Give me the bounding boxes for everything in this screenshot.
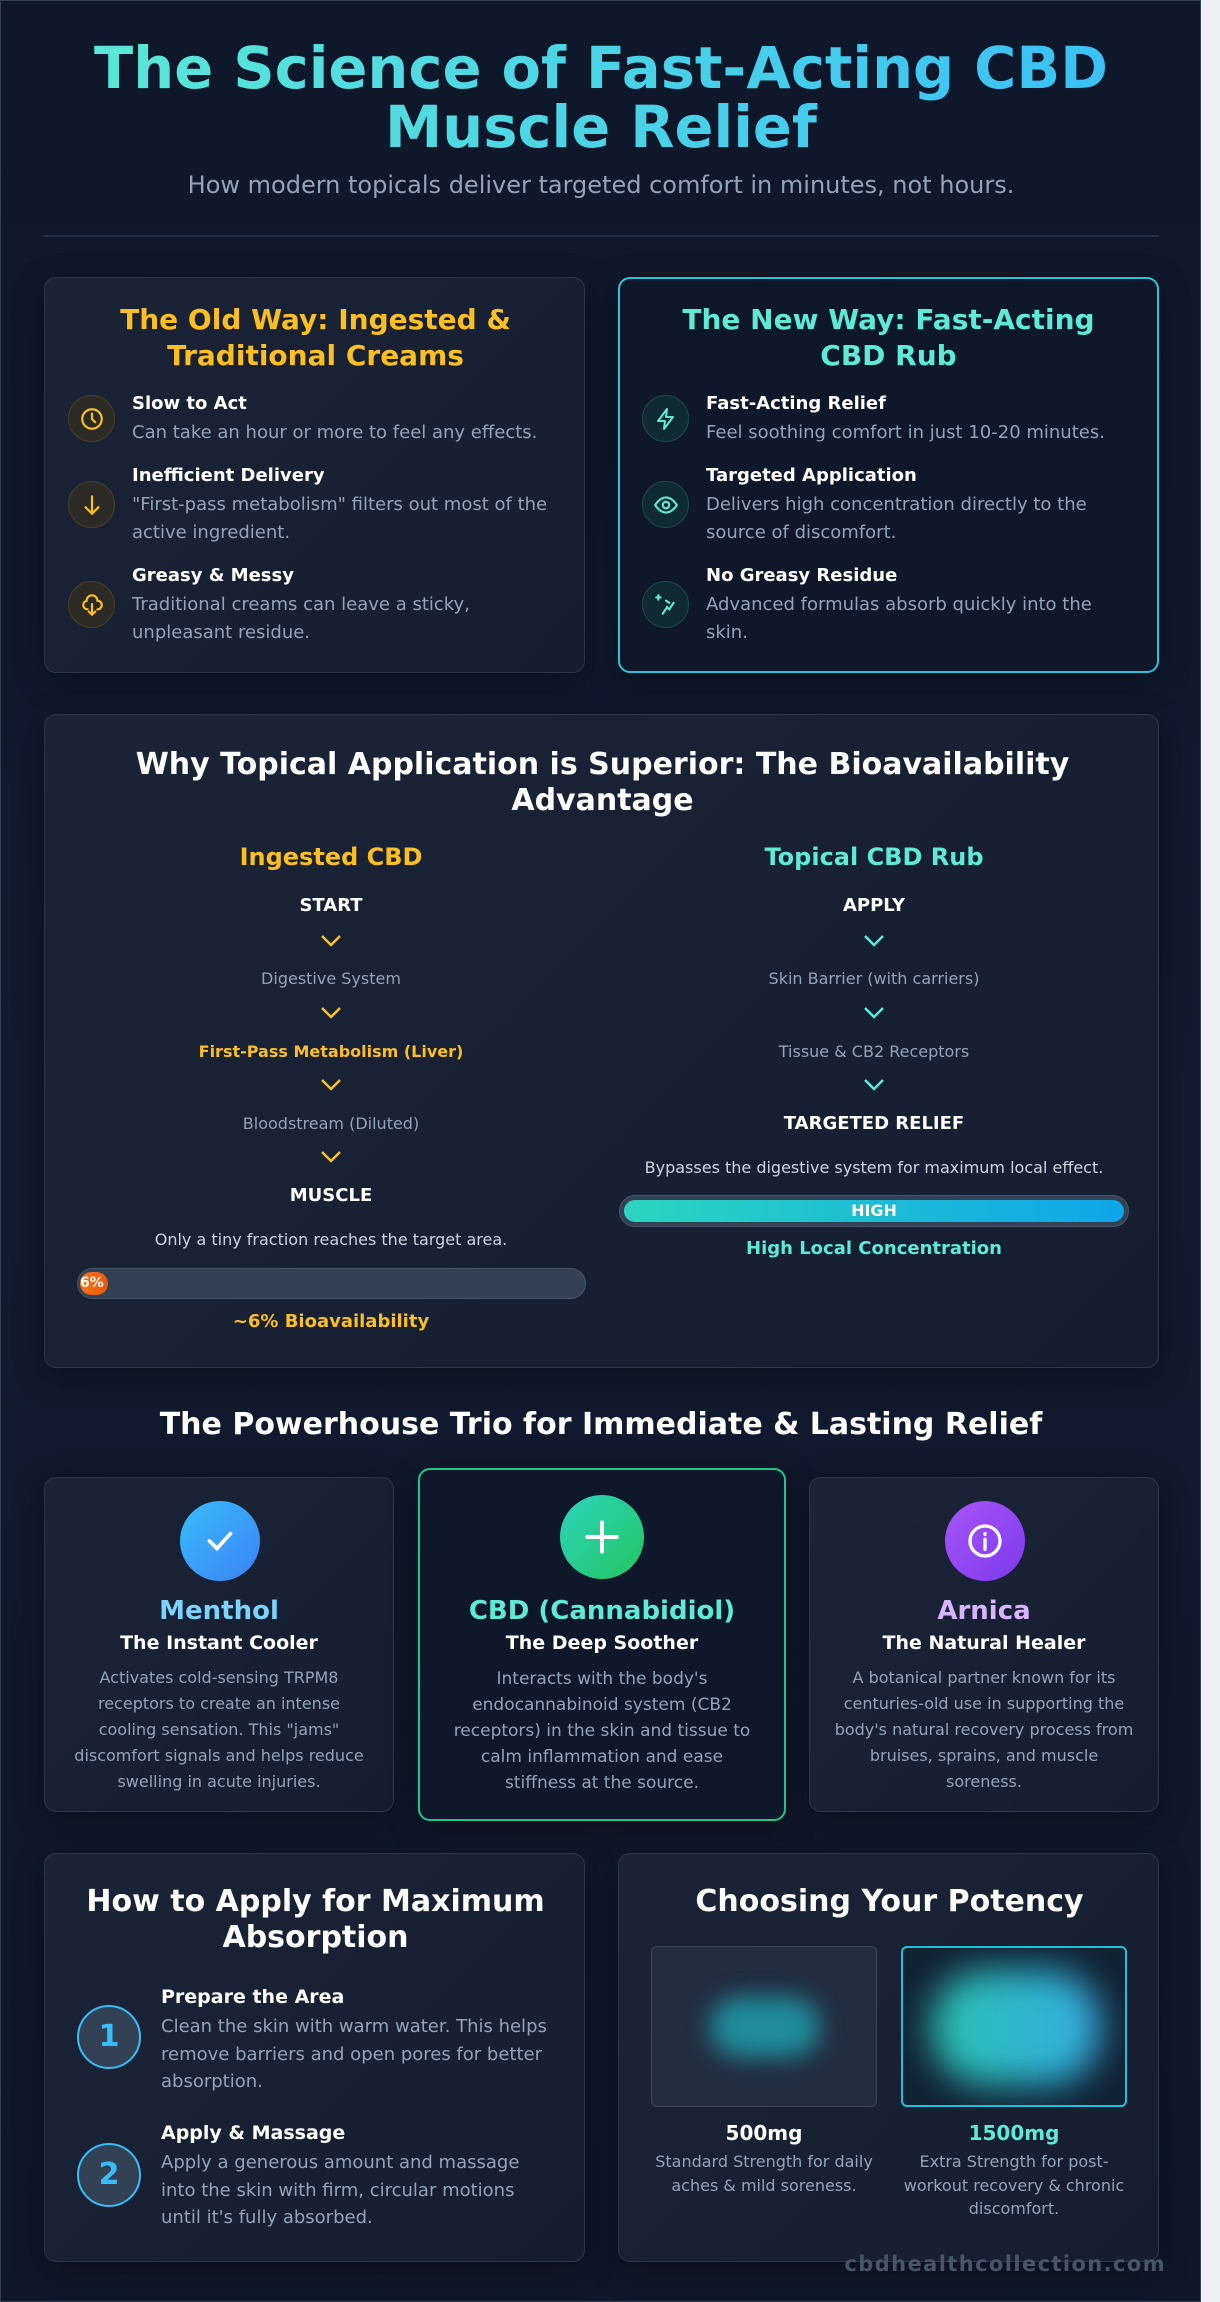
title — [1, 39, 1201, 157]
heading: how to apply: Absorption — [222, 1920, 409, 1955]
icon: sparkle — [642, 581, 689, 628]
bar: 6%: 6% — [80, 1275, 104, 1291]
item: greasy: Greasy & Messy — [132, 565, 294, 586]
heading: new way: The New Way: Fast-Acting — [682, 303, 1095, 336]
item: fast-acting: Fast-Acting Relief — [706, 393, 886, 414]
subtitle: How modern topicals deliver targeted comfort in minutes, not hours. — [188, 171, 1014, 199]
step 1 — [77, 2005, 141, 2069]
card: arnica: The Natural Healer — [882, 1632, 1086, 1654]
column: topical: Tissue & CB2 Receptors — [779, 1042, 969, 1061]
card: cbd: Interacts with the body's endocannabinoid system (CB2 receptors) in the skin and tissue to calm inflammation and ease stiffness at the source. — [454, 1669, 750, 1793]
panel: how to apply: Apply & Massage — [161, 2122, 345, 2144]
step 2: 2 — [99, 2157, 119, 2192]
potency: 500mg — [651, 1946, 877, 2107]
card: arnica — [809, 1477, 1159, 1812]
panel: new way: Advanced formulas absorb quickly into the skin. — [706, 594, 1092, 643]
card: cbd: CBD (Cannabidiol) — [469, 1596, 735, 1626]
card: menthol: Activates cold-sensing TRPM8 receptors to create an intense cooling sensation. This "jams" discomfort signals and helps reduce swelling in acute injuries. — [74, 1668, 364, 1791]
icon: plus — [560, 1495, 644, 1579]
item: inefficient delivery: Inefficient Delivery — [132, 465, 325, 486]
icon: cloud — [68, 581, 115, 628]
icon: check — [180, 1501, 260, 1581]
column: topical — [619, 843, 1129, 1259]
card: menthol: The Instant Cooler — [120, 1632, 318, 1654]
watermark: cbdhealthcollection.com — [844, 2252, 1166, 2276]
item: targeted: Targeted Application — [706, 465, 917, 486]
column: ingested: Only a tiny fraction reaches the target area. — [155, 1230, 507, 1249]
heading: old way — [120, 303, 511, 372]
panel: old way: Traditional creams can leave a sticky, unpleasant residue. — [132, 594, 470, 643]
panel: potency: 1500mg — [969, 2121, 1059, 2145]
bar: 6% — [77, 1268, 586, 1299]
column: ingested: First-Pass Metabolism (Liver) — [199, 1042, 463, 1061]
icon: bolt — [642, 395, 689, 442]
icon: clock — [68, 395, 115, 442]
card: menthol — [44, 1477, 394, 1812]
heading: new way — [682, 303, 1095, 372]
potency: 1500mg — [901, 1946, 1127, 2107]
panel: how to apply: Clean the skin with warm water. This helps remove barriers and open pores for better absorption. — [161, 2016, 547, 2092]
icon: arrow down — [68, 481, 115, 528]
panel: new way: Feel soothing comfort in just 10-20 minutes. — [706, 422, 1105, 443]
panel: new way — [618, 277, 1159, 673]
column: ingested: Ingested CBD — [240, 843, 422, 871]
card: arnica: A botanical partner known for its centuries-old use in supporting the body's natural recovery process from bruises, sprains, and muscle soreness. — [835, 1668, 1133, 1791]
panel: old way — [44, 277, 585, 673]
column: ingested: Digestive System — [261, 969, 401, 988]
panel: potency: Extra Strength for post-workout recovery & chronic discomfort. — [904, 2152, 1124, 2218]
panel: potency: Standard Strength for daily aches & mild soreness. — [655, 2152, 873, 2194]
column: ingested: START — [299, 895, 363, 916]
column: topical: Topical CBD Rub — [764, 843, 984, 871]
column: topical: Skin Barrier (with carriers) — [769, 969, 979, 988]
panel: old way: "First-pass metabolism" filters out most of the active ingredient. — [132, 494, 547, 543]
card: menthol: Menthol — [159, 1596, 279, 1626]
bar: high: HIGH — [851, 1201, 897, 1220]
panel: how to apply: Prepare the Area — [161, 1986, 344, 2008]
heading: new way: CBD Rub — [820, 339, 957, 372]
column: topical: APPLY — [843, 895, 905, 916]
column: topical: TARGETED RELIEF — [784, 1113, 964, 1134]
icon: eye — [642, 481, 689, 528]
heading: bioavailability — [136, 747, 1069, 818]
heading: bioavailability: Why Topical Application is Superior: The Bioavailability — [136, 747, 1069, 782]
column: ingested: Bloodstream (Diluted) — [243, 1114, 419, 1133]
heading: old way: Traditional Creams — [167, 339, 464, 372]
column: ingested: ~6% Bioavailability — [233, 1311, 429, 1332]
icon: info — [945, 1501, 1025, 1581]
heading: how to apply: How to Apply for Maximum — [86, 1884, 545, 1919]
title: The Science of Fast-Acting CBD — [94, 35, 1108, 102]
column: ingested — [77, 843, 586, 1332]
title: Muscle Relief — [385, 94, 817, 161]
card: cbd — [418, 1468, 786, 1821]
bar: high — [619, 1195, 1129, 1227]
heading: bioavailability: Advantage — [511, 783, 694, 818]
panel: potency — [618, 1853, 1159, 2262]
card: cbd: The Deep Soother — [506, 1632, 698, 1654]
column: ingested: MUSCLE — [290, 1185, 372, 1206]
heading: how to apply — [86, 1884, 545, 1955]
item: slow to act: Slow to Act — [132, 393, 247, 414]
panel: old way: Can take an hour or more to feel any effects. — [132, 422, 537, 443]
column: topical: High Local Concentration — [746, 1238, 1002, 1259]
panel: how to apply: Apply a generous amount and massage into the skin with firm, circular motions until it's fully absorbed. — [161, 2152, 519, 2228]
heading: powerhouse trio: The Powerhouse Trio for Immediate & Lasting Relief — [160, 1407, 1042, 1442]
panel: new way: Delivers high concentration directly to the source of discomfort. — [706, 494, 1087, 543]
panel: how to apply — [44, 1853, 585, 2262]
panel: potency: 500mg — [726, 2121, 802, 2145]
card: arnica: Arnica — [937, 1596, 1031, 1626]
step 1: 1 — [99, 2019, 119, 2054]
panel: bioavailability — [44, 714, 1159, 1368]
heading: old way: The Old Way: Ingested & — [120, 303, 511, 336]
column: topical: Bypasses the digestive system for maximum local effect. — [645, 1158, 1103, 1177]
heading: potency: Choosing Your Potency — [695, 1884, 1084, 1919]
item: no greasy: No Greasy Residue — [706, 565, 897, 586]
step 2 — [77, 2143, 141, 2207]
